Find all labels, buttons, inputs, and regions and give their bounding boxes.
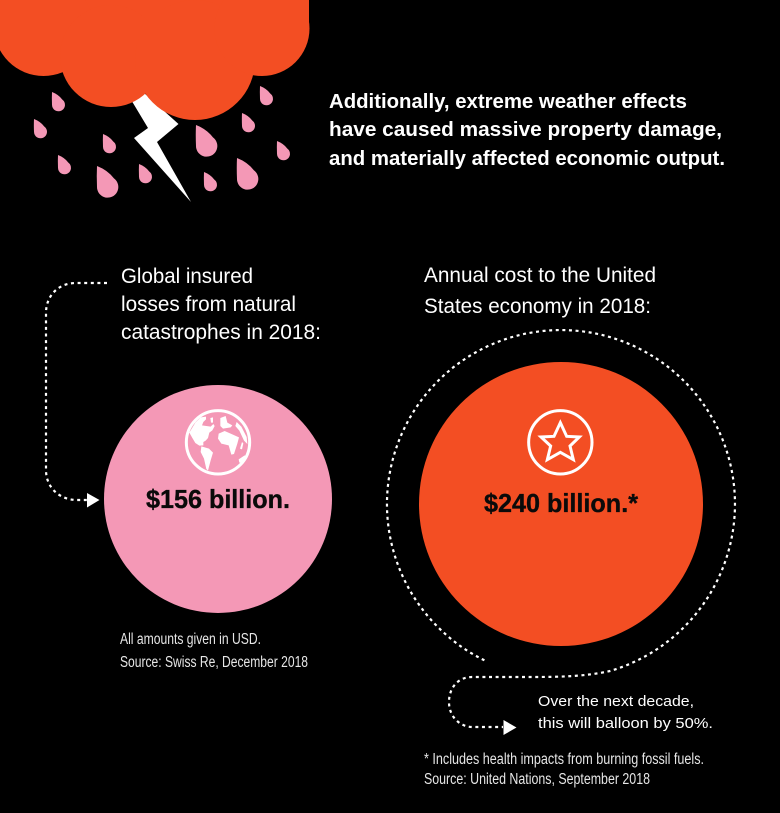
- heading: extreme weather statement: have caused massive property damage,: [329, 118, 722, 141]
- icon: globe: [186, 411, 250, 474]
- panel: global insured losses circle: [104, 385, 332, 613]
- text: left source note: All amounts given in USD.: [120, 631, 261, 648]
- text: global insured losses label: losses from natural: [121, 292, 296, 316]
- text: decade projection callout: Over the next decade,: [538, 693, 694, 710]
- arrow: dotted connector to pink circle: [46, 283, 107, 508]
- icon: star in ring: [529, 411, 592, 474]
- text: annual cost label: Annual cost to the United: [424, 263, 656, 287]
- text: global insured losses label: [121, 264, 321, 344]
- text: right source note: * Includes health impacts from burning fossil fuels.: [424, 751, 704, 768]
- icon: lightning bolt: [127, 84, 191, 202]
- text: annual cost label: States economy in 2018:: [424, 294, 651, 318]
- text: global insured losses label: catastrophes in 2018:: [121, 320, 321, 344]
- value: 156 billion: $156 billion.: [146, 484, 290, 514]
- text: left source note: Source: Swiss Re, December 2018: [120, 654, 308, 671]
- heading: extreme weather statement: and materially affected economic output.: [329, 147, 725, 170]
- text: right source note: [424, 751, 704, 788]
- heading: extreme weather statement: [329, 90, 725, 170]
- value: 240 billion: $240 billion.*: [484, 488, 639, 518]
- text: left source note: [120, 631, 308, 671]
- icon: cloud: [0, 0, 310, 120]
- text: decade projection callout: [538, 693, 713, 732]
- icon: storm cloud with rain and lightning: [0, 0, 310, 202]
- arrow: dotted ring around orange circle leading to projection: [387, 330, 735, 735]
- text: annual cost label: [424, 263, 656, 318]
- text: decade projection callout: this will balloon by 50%.: [538, 715, 713, 732]
- heading: extreme weather statement: Additionally, extreme weather effects: [329, 90, 687, 113]
- icon: rain drops: [34, 86, 290, 198]
- panel: annual US cost circle: [419, 362, 703, 646]
- text: global insured losses label: Global insured: [121, 264, 253, 288]
- text: right source note: Source: United Nations, September 2018: [424, 771, 650, 788]
